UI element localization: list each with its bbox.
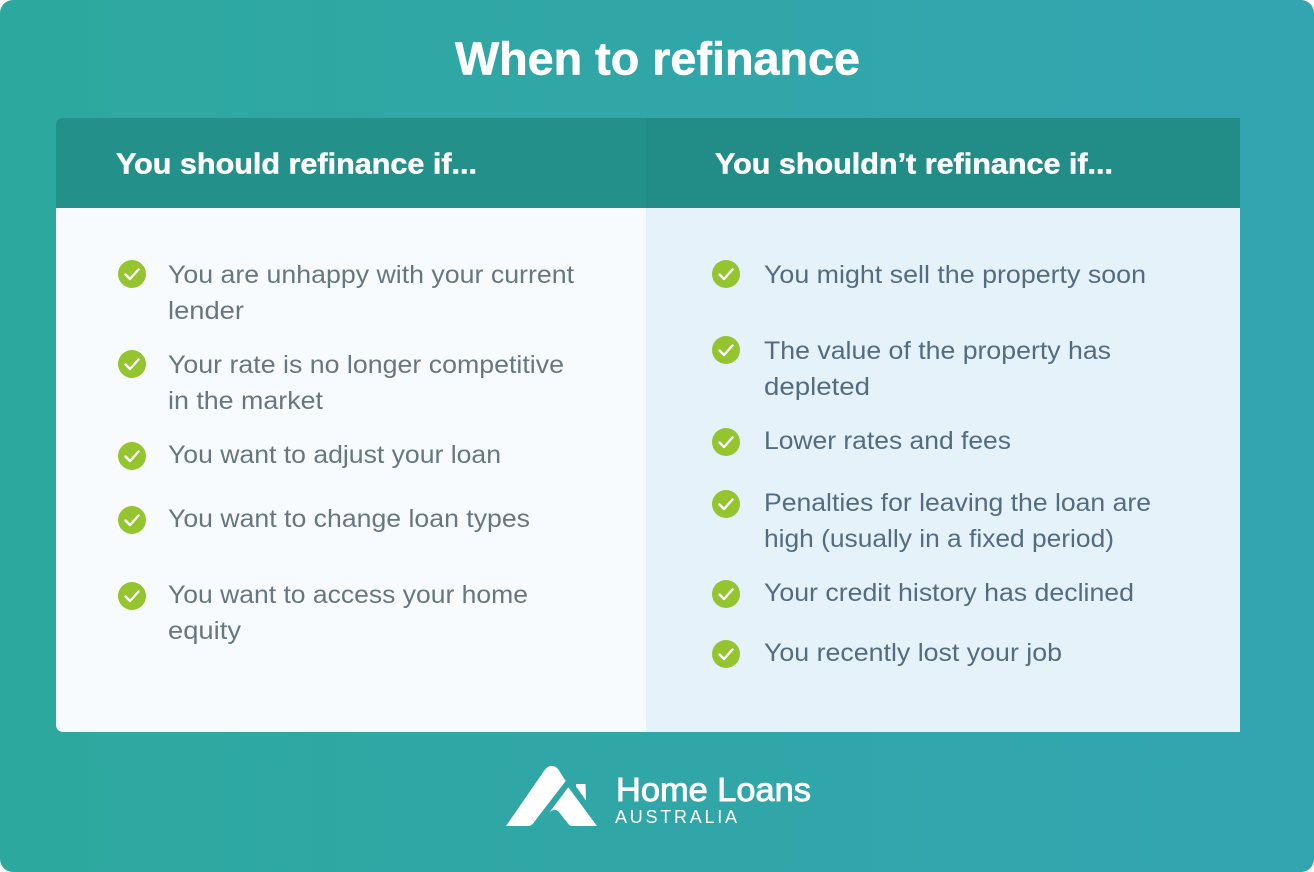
header bar left (56, 118, 646, 208)
item: rate not competitive (118, 350, 564, 415)
wordmark: Home Loans (616, 771, 811, 808)
tagline: AUSTRALIA (615, 807, 737, 827)
logo: Home Loans Australia (506, 766, 811, 827)
icon: roof mark (506, 766, 597, 826)
header bar right (646, 118, 1240, 208)
list: reasons to refinance (118, 260, 574, 645)
item: penalties (712, 489, 1151, 553)
item: penalties: high (usually in a fixed period) (764, 525, 1114, 553)
panel: should refinance (56, 208, 646, 732)
item: rate not competitive: in the market (168, 387, 323, 415)
title: When to refinance (455, 32, 860, 84)
item: access home equity (118, 581, 528, 645)
item: unhappy with lender: lender (168, 297, 244, 325)
item: might sell: You might sell the property soon (764, 261, 1146, 289)
item: access home equity: equity (168, 617, 242, 645)
item: value depleted: depleted (764, 373, 870, 401)
item: change loan types: You want to change loan types (168, 505, 530, 533)
item: lower rates: Lower rates and fees (764, 427, 1011, 455)
item: credit history: Your credit history has declined (764, 579, 1134, 607)
item: unhappy with lender (118, 260, 574, 325)
item: value depleted (712, 336, 1111, 401)
item: access home equity: You want to access your home (168, 581, 528, 609)
item: value depleted: The value of the property has (764, 337, 1111, 365)
item: rate not competitive: Your rate is no longer competitive (168, 351, 564, 379)
item: lost job: You recently lost your job (764, 639, 1062, 667)
panel: shouldn't refinance (646, 208, 1240, 732)
list: reasons not to refinance (712, 260, 1151, 668)
item: penalties: Penalties for leaving the loan are (764, 489, 1151, 517)
heading: you should refinance if: You should refinance if... (116, 148, 477, 180)
item: adjust loan: You want to adjust your loan (168, 441, 501, 469)
item: unhappy with lender: You are unhappy with your current (168, 261, 574, 289)
heading: you shouldn't refinance if: You shouldn’t refinance if... (715, 148, 1113, 180)
table (56, 118, 1240, 732)
